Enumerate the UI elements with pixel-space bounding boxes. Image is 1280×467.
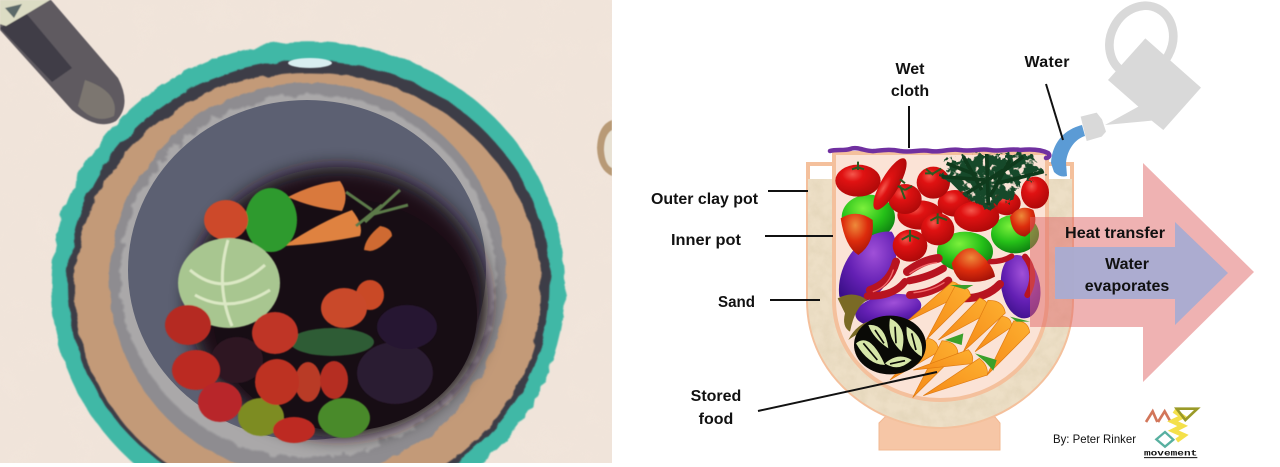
photo: inner pot interior: [128, 100, 488, 440]
food: chillies: [867, 256, 1032, 298]
label: water evaporates: Water: [1105, 256, 1149, 273]
label: sand: [718, 294, 820, 311]
base of pot: [879, 417, 1000, 450]
food: carrots: [890, 282, 1030, 398]
photo: clay pot cooler seen from above: [0, 0, 612, 467]
stored food illustration: [835, 153, 1049, 398]
logo: movement: movement: [1144, 450, 1198, 459]
photo: rim highlight: [120, 94, 496, 458]
label: inner pot: Inner pot: [671, 232, 742, 249]
food: tomatoes: [835, 154, 999, 262]
label: sand: Sand: [718, 294, 755, 311]
sand fill: [808, 179, 1072, 429]
wet cloth: [830, 148, 1049, 158]
food: back tomatoes: [897, 177, 1049, 230]
food: orange and red peppers: [841, 208, 1035, 282]
label: water evaporates: [1085, 256, 1169, 295]
logo: movement: [1144, 409, 1198, 459]
photo: white chip on rim: [288, 58, 332, 68]
photo: teal outer pot: [51, 42, 565, 467]
photo: sand ring: [75, 72, 541, 467]
label: wet cloth: cloth: [891, 83, 929, 100]
watering can nozzle: [1081, 113, 1106, 141]
inner pot: [834, 153, 1047, 400]
food: parsley: [939, 153, 1043, 207]
diagram: pot cross-section: [808, 153, 1072, 450]
food: carrot tops: [945, 285, 1030, 371]
label: heat transfer: Heat transfer: [1065, 225, 1165, 242]
food: green peppers: [842, 195, 1039, 272]
food: aubergines: [838, 231, 1045, 340]
heat transfer arrow: [1030, 163, 1254, 382]
photo: object at right edge: [597, 120, 612, 176]
watering can handle: [1097, 0, 1185, 87]
photo: dark inner edge of outer pot: [68, 60, 550, 467]
photo: vegetables: [165, 181, 437, 443]
label: stored food: food: [699, 411, 733, 428]
photo: carrots: [284, 181, 408, 251]
food: cabbage: [854, 316, 926, 374]
credit: By: Peter Rinker: [1053, 432, 1136, 446]
label: water: Water: [1024, 54, 1070, 71]
label: water: [1024, 54, 1070, 140]
label: water evaporates: evaporates: [1085, 278, 1169, 295]
label: outer clay pot: Outer clay pot: [651, 191, 759, 208]
label: wet cloth: [891, 61, 929, 148]
watering can body and spout: [1105, 38, 1201, 130]
label: wet cloth: Wet: [895, 61, 925, 78]
watering can: [1081, 0, 1201, 141]
label: stored food: Stored: [691, 388, 741, 405]
outer clay pot: [808, 164, 1072, 427]
photo: shoe: [0, 0, 125, 124]
photo: grey rim of inner pot: [110, 83, 506, 467]
water pipe: [1051, 125, 1085, 176]
label: stored food: [691, 372, 937, 428]
water evaporates arrow: [1055, 222, 1228, 325]
